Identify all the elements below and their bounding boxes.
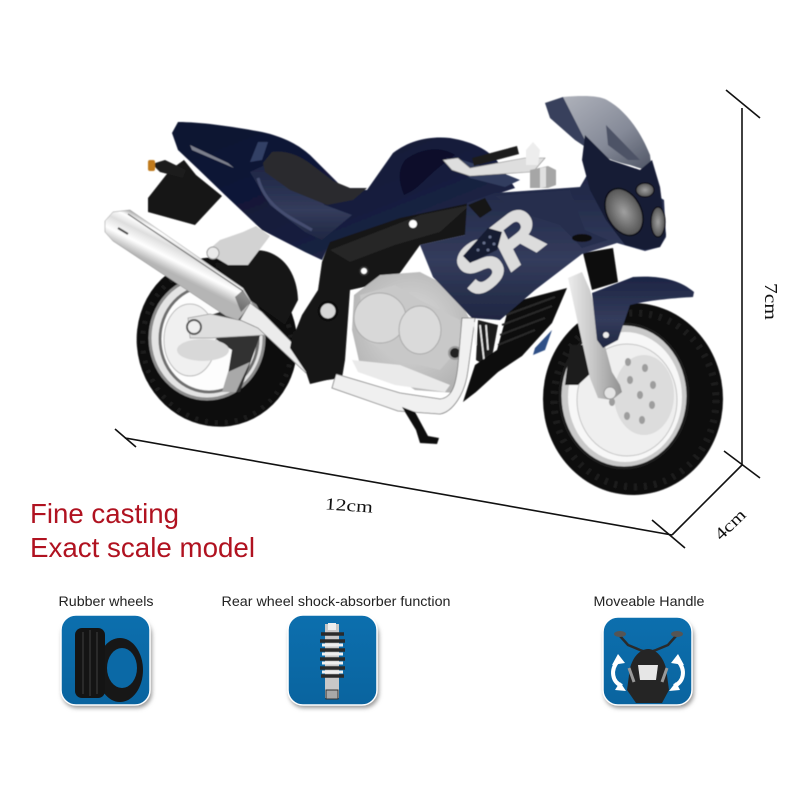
exhaust silencer — [105, 210, 314, 373]
footpeg bracket — [290, 322, 340, 384]
caption: Moveable Handle — [594, 593, 705, 609]
motorcycle model — [105, 96, 723, 495]
label: 4cm: 4cm — [711, 505, 750, 544]
rear wheel — [118, 239, 316, 445]
tank highlight — [400, 149, 520, 195]
exhaust header pipes — [332, 318, 498, 414]
windscreen — [545, 96, 652, 172]
label: 7cm: 7cm — [761, 283, 781, 320]
side fairing — [420, 170, 666, 320]
footrest plate — [463, 228, 502, 263]
caption: Rear wheel shock-absorber function — [222, 593, 450, 609]
feature: moveable handle — [594, 593, 705, 708]
dimension lines — [115, 90, 760, 548]
SR decal: SR — [439, 194, 557, 309]
nose cowl — [582, 135, 666, 250]
tail section — [172, 122, 515, 260]
swingarm — [187, 314, 265, 338]
icon tile — [61, 615, 152, 708]
rear hugger and shock mount — [206, 226, 298, 325]
feature: shock absorber — [222, 593, 450, 708]
engine — [352, 272, 470, 393]
seat — [263, 152, 367, 205]
handlebar — [443, 142, 556, 188]
feature: rubber wheels — [58, 593, 154, 708]
heading: fine casting: Fine casting — [30, 498, 179, 529]
icon tile — [288, 615, 379, 708]
icon tile — [603, 617, 694, 708]
caption: Rubber wheels — [58, 593, 154, 609]
heading line: exact scale model: Exact scale model — [30, 532, 255, 563]
label: 12cm: 12cm — [324, 494, 374, 517]
front fork — [568, 248, 622, 400]
front fender — [592, 277, 694, 348]
length dimension line — [115, 429, 685, 548]
radiator — [463, 288, 567, 402]
rear mudguard and indicator — [148, 160, 222, 225]
heading: fine casting — [30, 498, 255, 563]
front wheel — [543, 303, 723, 495]
side stand — [402, 407, 439, 444]
main frame — [290, 198, 500, 382]
depth dimension line — [672, 465, 742, 535]
headlights — [597, 182, 665, 242]
height dimension line — [724, 90, 760, 478]
